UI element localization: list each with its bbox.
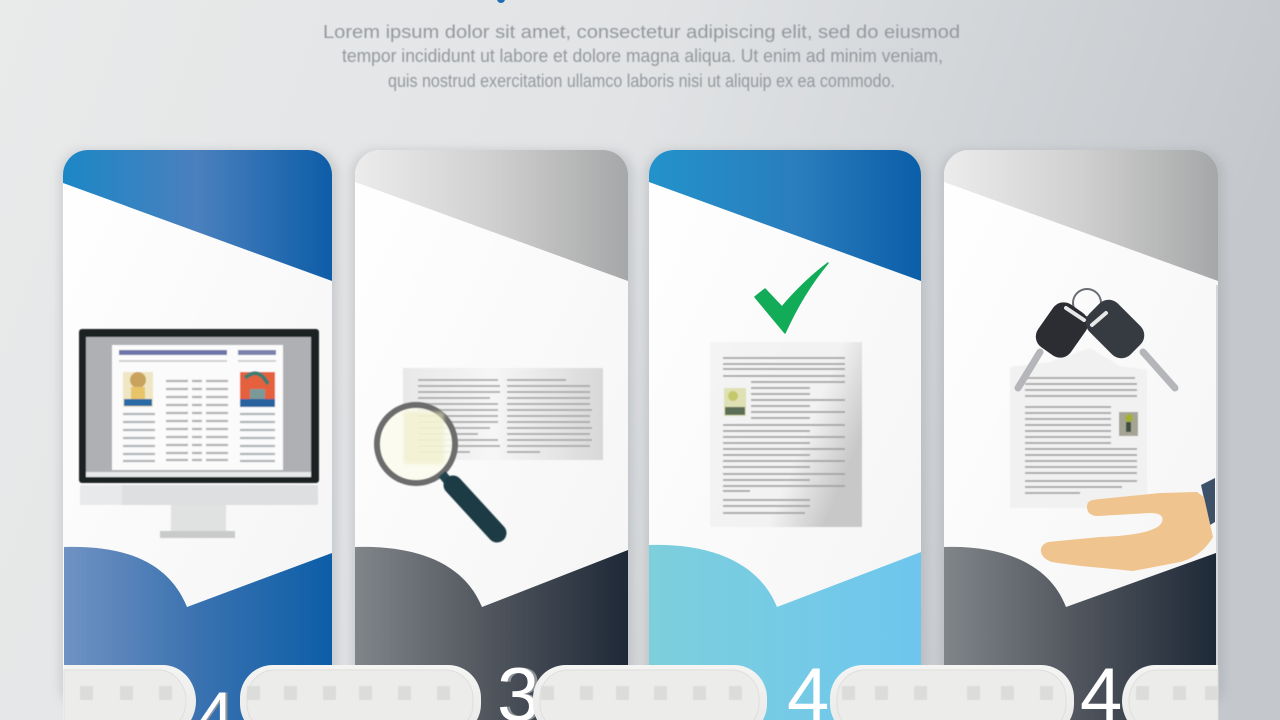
icon: green check mark bbox=[755, 263, 828, 333]
panel: step 2 review bbox=[355, 150, 628, 720]
document: two-column page bbox=[403, 368, 603, 460]
heading accent bbox=[497, 0, 505, 3]
icon: car keys bbox=[1018, 289, 1175, 388]
card shadows bbox=[60, 150, 1224, 710]
intro text bbox=[323, 22, 960, 91]
top band: step 3 bbox=[649, 150, 921, 281]
bottom band: step 3 bbox=[649, 545, 921, 720]
pill 2 bbox=[240, 665, 481, 720]
top band: step 2 bbox=[355, 150, 628, 281]
panel: step 1 screen bbox=[63, 150, 332, 720]
icon: magnifying glass bbox=[377, 405, 497, 533]
pill 5 bbox=[1122, 665, 1218, 720]
intro text: Lorem ipsum dolor sit amet, consectetur adipiscing elit, sed do eiusmod bbox=[323, 22, 960, 42]
document: approved page bbox=[710, 342, 862, 527]
panel: step 4 handover bbox=[944, 150, 1218, 720]
pill 4 bbox=[830, 665, 1074, 720]
icon: desktop monitor bbox=[79, 329, 319, 538]
panel: step 3 approval bbox=[649, 150, 921, 720]
bottom band: step 4 bbox=[944, 547, 1216, 720]
icon: hand bbox=[1041, 478, 1215, 571]
bottom band: step 2 bbox=[355, 547, 628, 720]
document: contract page bbox=[1010, 348, 1147, 508]
pill 3 bbox=[533, 665, 767, 720]
connector pills bbox=[64, 665, 1218, 720]
top band: step 1 bbox=[63, 150, 332, 281]
pill 1 bbox=[64, 665, 196, 720]
intro text: tempor incididunt ut labore et dolore magna aliqua. Ut enim ad minim veniam, bbox=[342, 46, 943, 66]
intro text: quis nostrud exercitation ullamco laboris nisi ut aliquip ex ea commodo. bbox=[388, 71, 895, 91]
top band: step 4 bbox=[944, 150, 1218, 281]
step numbers bbox=[197, 653, 1122, 720]
bottom band: step 1 bbox=[64, 547, 332, 720]
